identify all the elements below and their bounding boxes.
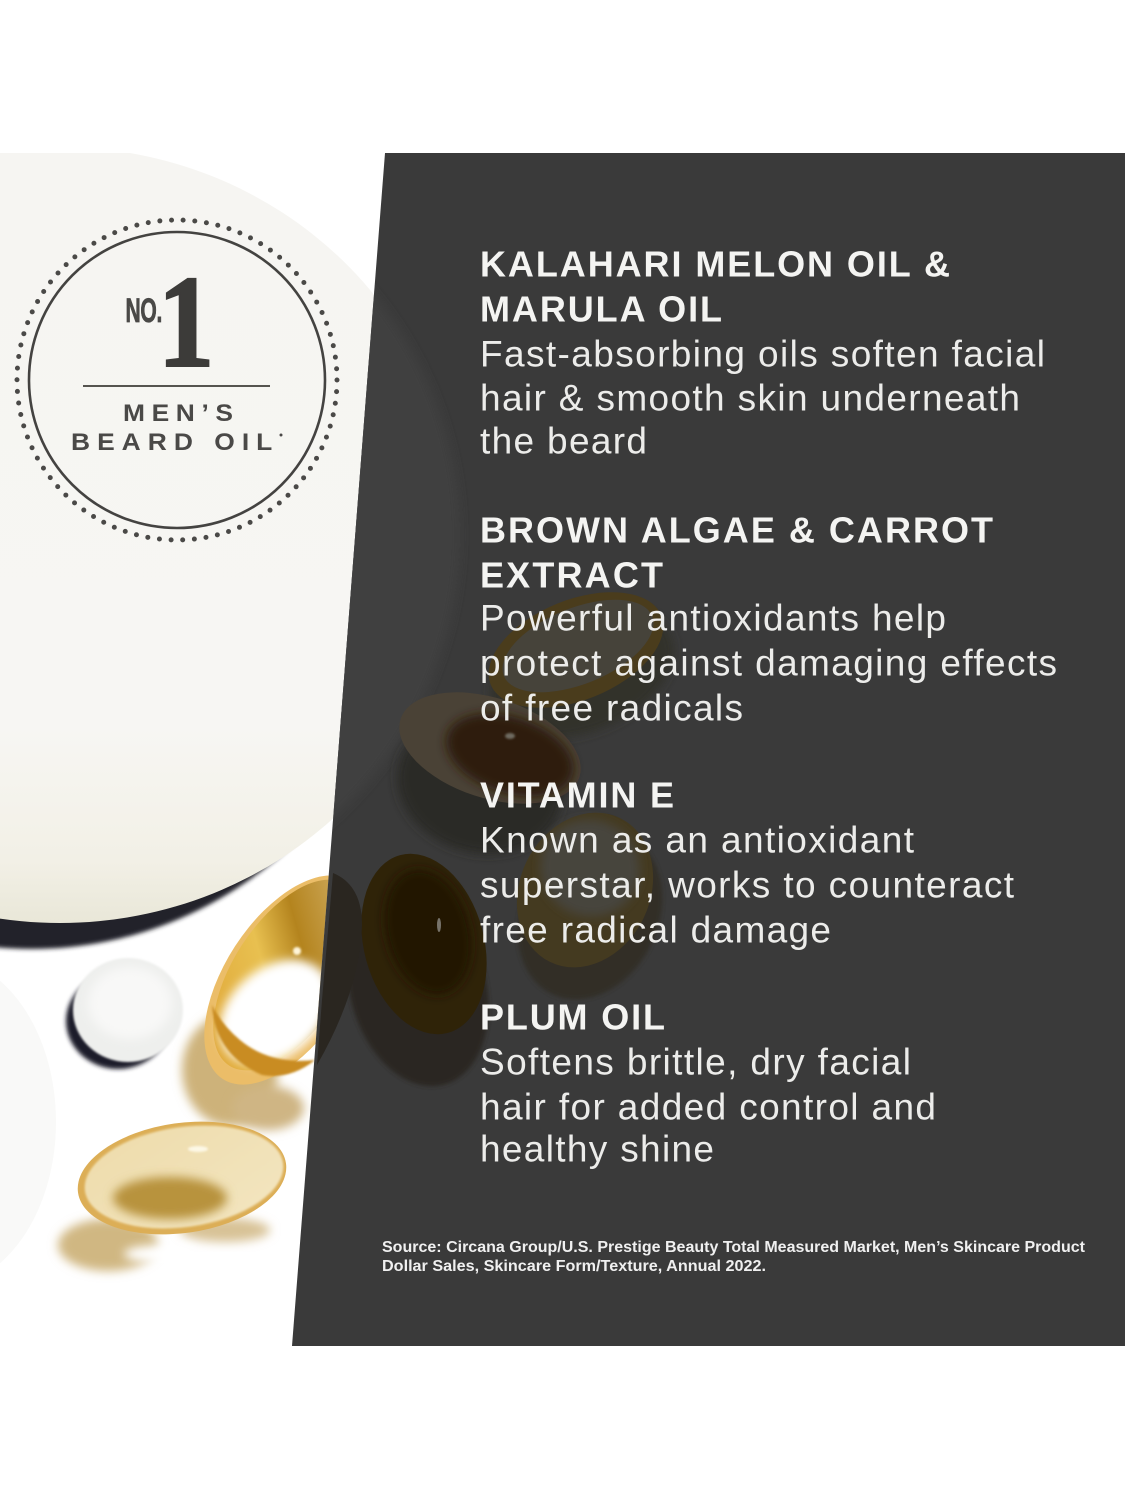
ingredient: Kalahari melon oil and marula oil: the beard xyxy=(480,420,647,462)
ingredient: plum oil: PLUM OIL xyxy=(480,996,665,1038)
gold capsule shadow xyxy=(182,1014,278,1126)
photo: oil drops and capsules xyxy=(0,153,374,1278)
small clear drop xyxy=(66,958,183,1069)
ingredient: plum oil: healthy shine xyxy=(480,1128,714,1170)
lower capsule shadow xyxy=(58,1219,158,1271)
source note xyxy=(382,1239,1085,1275)
ingredient: Kalahari melon oil and marula oil xyxy=(480,244,1045,462)
panel: capsules seen through the panel xyxy=(28,230,674,1088)
ingredient: vitamin E xyxy=(480,774,1015,950)
ingredient: vitamin E: free radical damage xyxy=(480,910,831,950)
ingredient: brown algae and carrot extract: of free radicals xyxy=(480,688,743,728)
faint partial drop at left edge xyxy=(0,957,56,1287)
ingredient: plum oil: Softens brittle, dry facial xyxy=(480,1042,911,1082)
source note: Source: Circana Group/U.S. Prestige Beauty Total Measured Market, Men’s Skincare Product xyxy=(382,1239,1085,1256)
ingredient: vitamin E: VITAMIN E xyxy=(480,774,674,816)
No. label: NO. xyxy=(126,291,162,329)
lower gold capsule xyxy=(78,1122,286,1234)
ingredient: Kalahari melon oil and marula oil: Fast-absorbing oils soften facial xyxy=(480,334,1045,374)
badge: No. 1 men's beard oil xyxy=(17,220,337,540)
ingredient: brown algae and carrot extract: EXTRACT xyxy=(480,554,663,596)
ingredient: Kalahari melon oil and marula oil: KALAHARI MELON OIL & xyxy=(480,244,950,284)
beard oil: BEARD OIL xyxy=(71,429,272,456)
capsule centre left, through panel xyxy=(396,692,580,855)
ingredient: Kalahari melon oil and marula oil: MARULA OIL xyxy=(480,288,722,330)
badge divider xyxy=(83,385,270,387)
capsule centre right, through panel xyxy=(517,812,662,1000)
ingredient: vitamin E: Known as an antioxidant xyxy=(480,820,915,860)
source note: Dollar Sales, Skincare Form/Texture, Annual 2022. xyxy=(382,1258,766,1275)
upright gold capsule xyxy=(204,876,329,1084)
upright capsule continued through panel xyxy=(317,873,362,1065)
ingredient: plum oil: hair for added control and xyxy=(480,1086,936,1128)
capsule top right, through panel xyxy=(488,592,674,737)
dotted ring xyxy=(17,220,337,540)
big dark capsule and shadow through panel xyxy=(349,854,490,1088)
ingredient: brown algae and carrot extract: protect against damaging effects xyxy=(480,642,1057,684)
ingredient: brown algae and carrot extract xyxy=(480,510,1057,728)
ingredient: plum oil xyxy=(480,996,936,1170)
ingredient: brown algae and carrot extract: Powerful antioxidants help xyxy=(480,598,946,638)
footnote mark xyxy=(280,434,282,436)
numeral 1: 1 xyxy=(158,248,214,395)
dark text panel xyxy=(292,153,1125,1346)
large cream drop edge through panel xyxy=(332,290,374,824)
ingredient: vitamin E: superstar, works to counteract xyxy=(480,864,1015,906)
ingredient: Kalahari melon oil and marula oil: hair & smooth skin underneath xyxy=(480,378,1020,418)
men's: MEN’S xyxy=(123,400,233,427)
ingredient: brown algae and carrot extract: BROWN ALGAE & CARROT xyxy=(480,510,993,550)
large cream oil drop xyxy=(0,153,374,953)
solid ring xyxy=(29,232,325,528)
